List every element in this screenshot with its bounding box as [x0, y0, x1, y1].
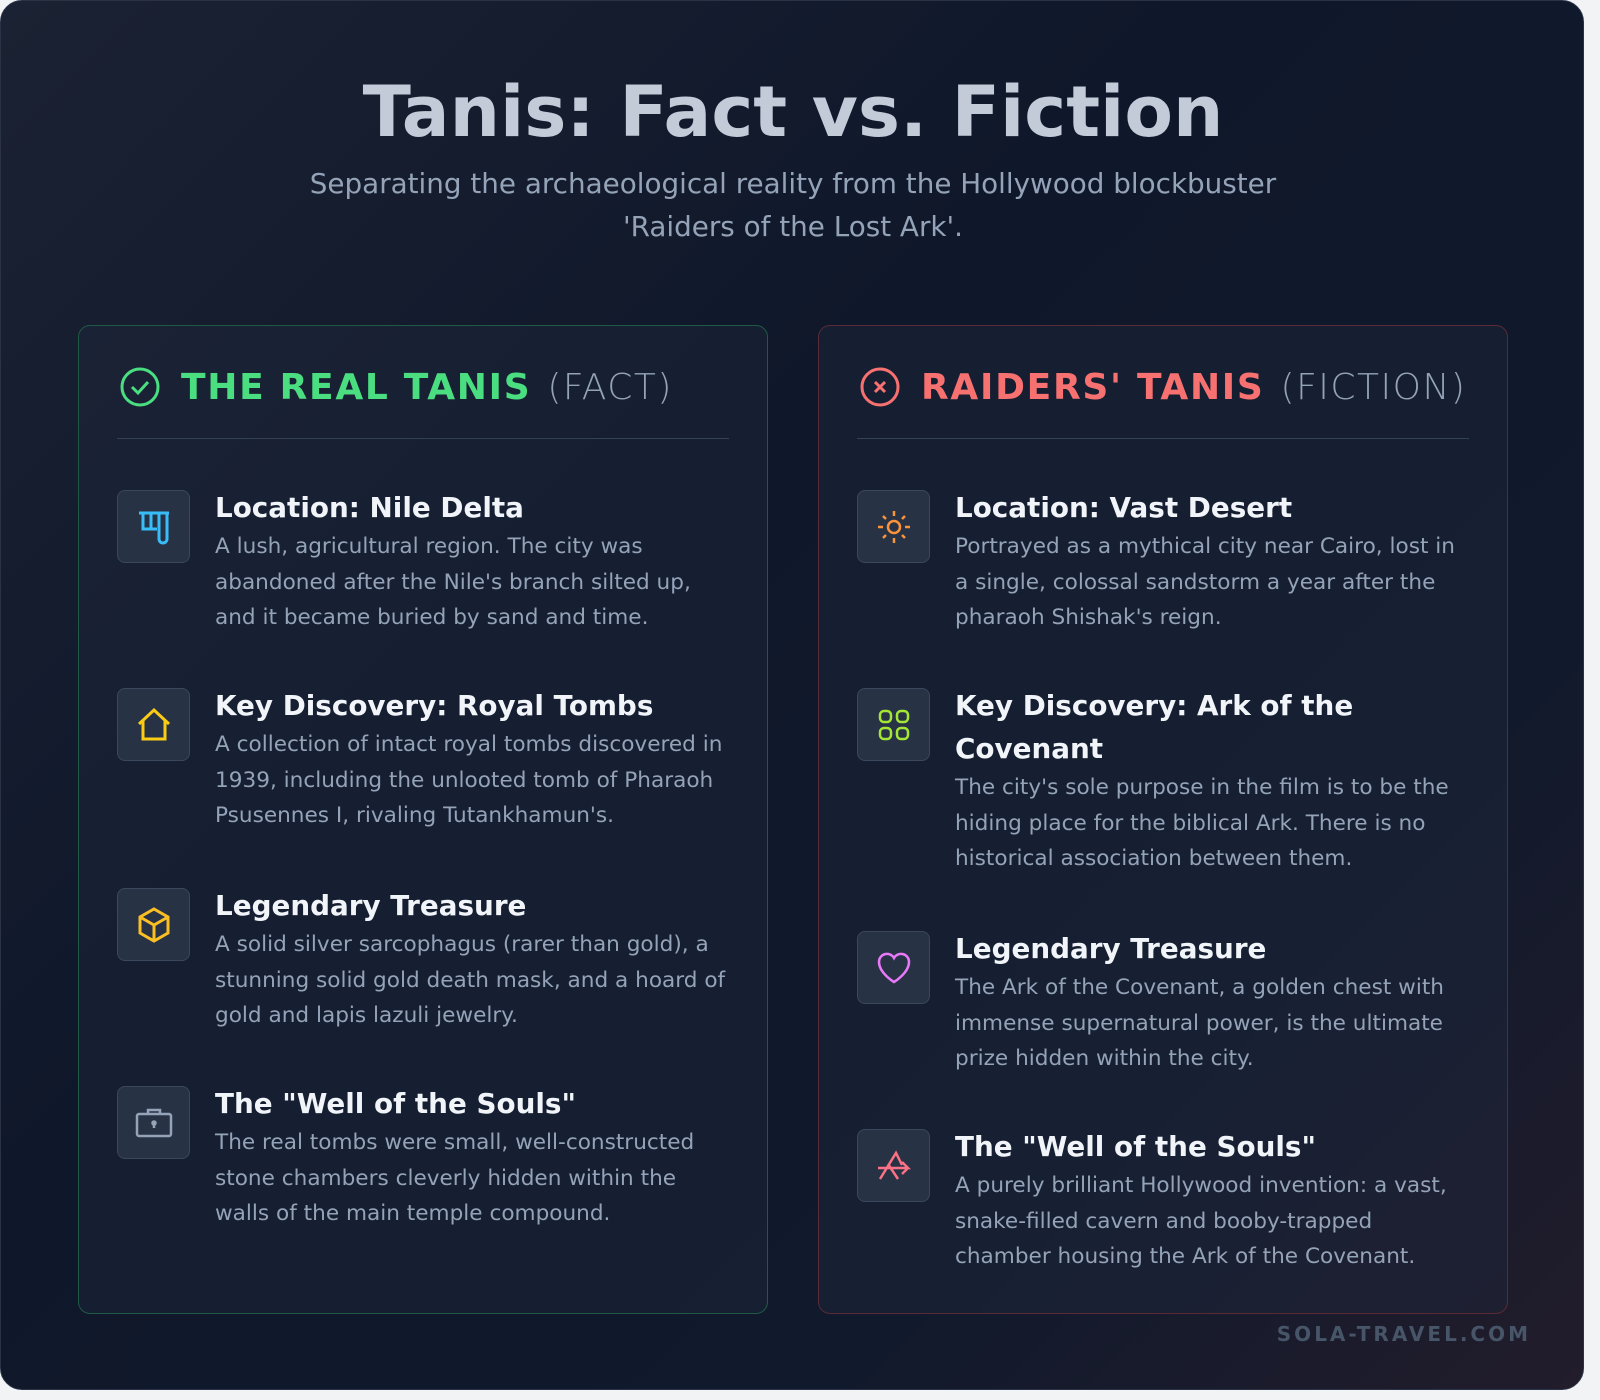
panel: fact	[78, 325, 768, 1314]
fiction item: discovery	[857, 688, 1449, 871]
title: Tanis: Fact vs. Fiction	[363, 70, 1223, 153]
subtitle: Separating the archaeological reality from the Hollywood blockbuster 'Raiders of the Lost Ark'.	[310, 167, 1276, 243]
fact header: THE REAL TANIS	[181, 366, 531, 408]
fact item: discovery	[117, 688, 722, 828]
panel: fact: A collection of intact royal tombs discovered in 1939, including the unlooted tomb of Pharaoh Psusennes I, rivaling Tutankhamun's.	[215, 732, 722, 828]
panel: fact: Legendary Treasure	[215, 889, 526, 922]
panel: fiction: Legendary Treasure	[955, 932, 1266, 965]
fiction item: treasure	[857, 931, 1444, 1071]
fact item: treasure	[117, 888, 726, 1028]
panel: fiction: The "Well of the Souls"	[955, 1130, 1316, 1163]
fiction item: location	[857, 490, 1455, 630]
panel: fact: Key Discovery: Royal Tombs	[215, 689, 653, 722]
panel: fiction: Key Discovery: Ark of the Covenant	[955, 689, 1353, 765]
fact header	[120, 366, 673, 408]
panel: fact: Location: Nile Delta	[215, 491, 524, 524]
panel: fact: A solid silver sarcophagus (rarer than gold), a stunning solid gold death mask, and a hoard of gold and lapis lazuli jewelry.	[215, 932, 725, 1028]
panel: fact: A lush, agricultural region. The city was abandoned after the Nile's branch silted up, and it became buried by sand and time.	[215, 534, 691, 630]
fact header: (FACT)	[547, 366, 673, 408]
fiction item: well	[857, 1129, 1447, 1269]
panel: fact: The "Well of the Souls"	[215, 1087, 576, 1120]
panel: fiction	[818, 325, 1508, 1314]
panel: fiction: The Ark of the Covenant, a golden chest with immense supernatural power, is the ultimate prize hidden within the city.	[955, 975, 1444, 1071]
panel: fact: The real tombs were small, well-constructed stone chambers cleverly hidden within the walls of the main temple compound.	[215, 1130, 694, 1226]
fact item: well	[117, 1086, 694, 1226]
fiction header: RAIDERS' TANIS	[921, 366, 1265, 408]
panel: fiction: Portrayed as a mythical city near Cairo, lost in a single, colossal sandstorm a year after the pharaoh Shishak's reign.	[955, 534, 1455, 630]
fact item: location	[117, 490, 691, 630]
fiction header	[860, 366, 1466, 408]
footer: SOLA-TRAVEL.COM	[1277, 1322, 1531, 1346]
panel: fiction: A purely brilliant Hollywood invention: a vast, snake-filled cavern and booby-trapped chamber housing the Ark of the Covenant.	[955, 1173, 1447, 1269]
panel: fiction: Location: Vast Desert	[955, 491, 1292, 524]
panel: fiction: The city's sole purpose in the film is to be the hiding place for the biblical Ark. There is no historical association between them.	[955, 775, 1449, 871]
fiction header: (FICTION)	[1281, 366, 1466, 408]
